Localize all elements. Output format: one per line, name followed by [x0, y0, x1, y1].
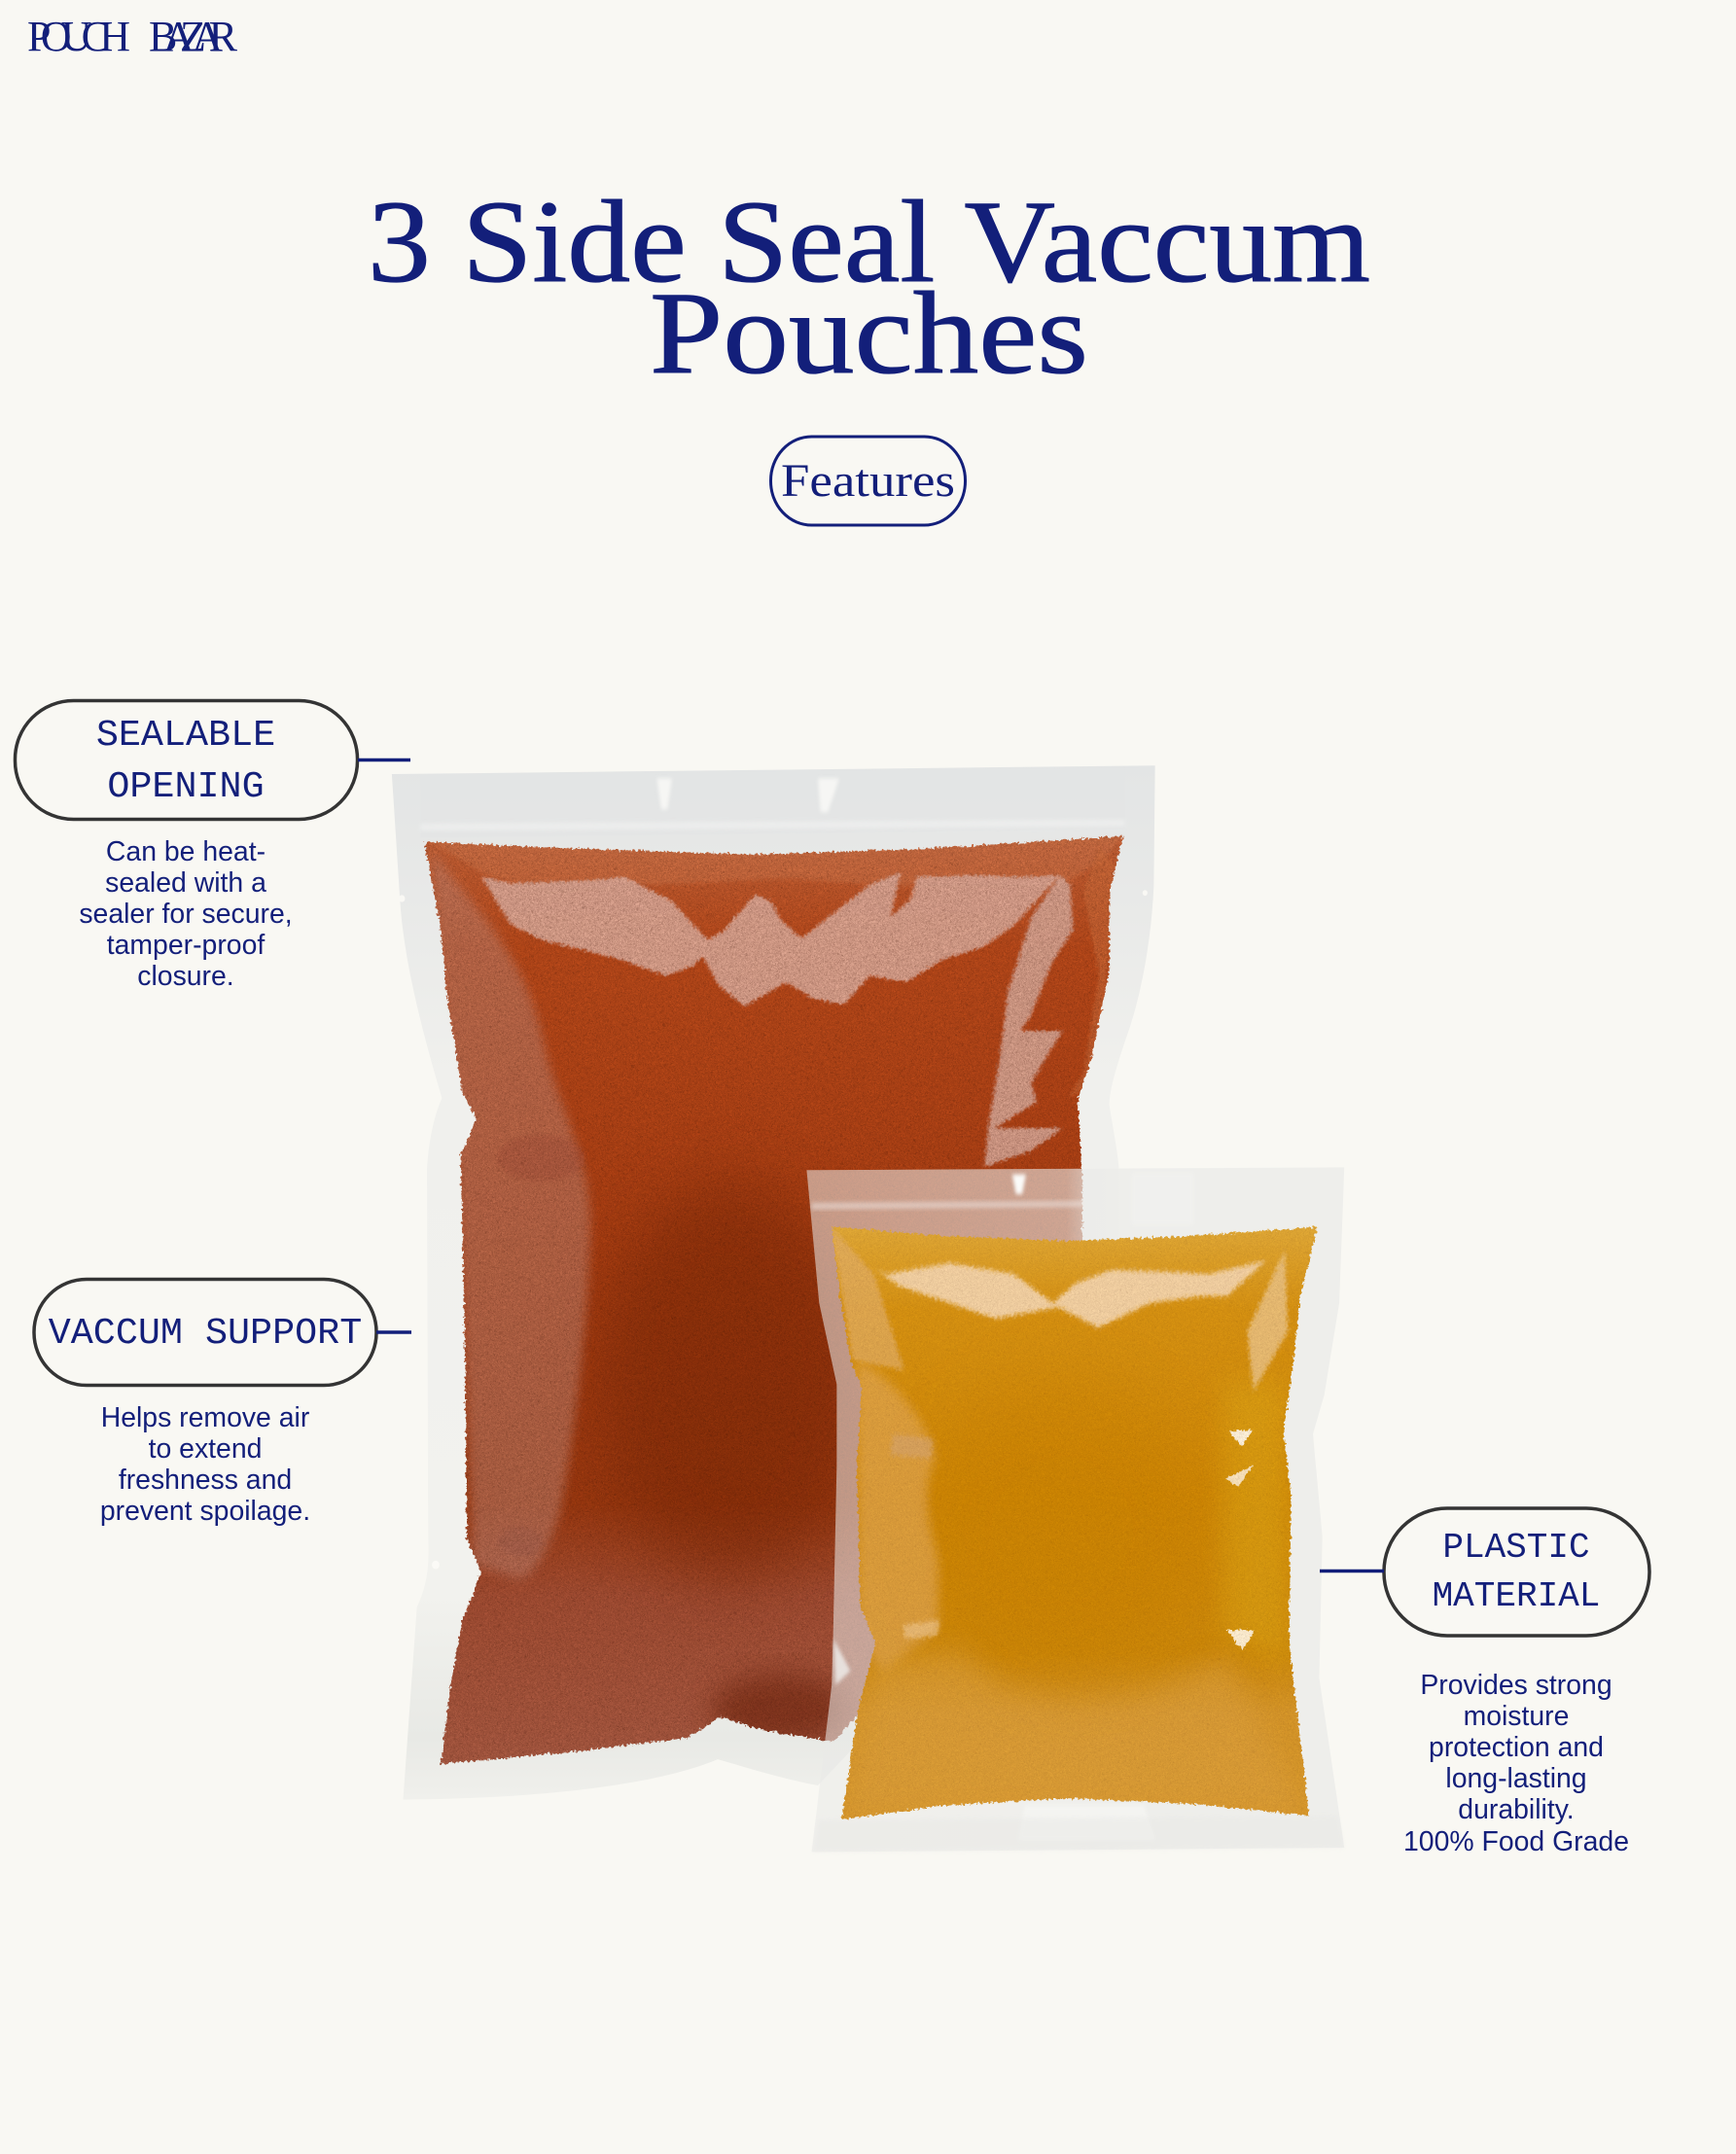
seal band and tear notches	[399, 767, 1148, 1569]
title: Pouches	[650, 268, 1088, 399]
logo: POUCH	[27, 13, 130, 60]
callout: vaccum support: VACCUM SUPPORT	[49, 1312, 362, 1355]
callout: sealable opening: OPENING	[107, 765, 265, 808]
right strip	[1222, 1381, 1291, 1664]
text: plastic material description: long-lasting	[1445, 1763, 1587, 1794]
title	[368, 177, 1370, 399]
callout: sealable opening	[16, 700, 410, 819]
text: plastic material description: moisture	[1464, 1701, 1569, 1732]
text: sealable opening description: closure.	[137, 961, 234, 992]
seal lines and notch	[812, 1172, 1344, 1852]
text: sealable opening description: Can be heat-	[106, 836, 266, 867]
text: vaccum support description: freshness and	[119, 1465, 292, 1496]
text: sealable opening description: tamper-proof	[107, 930, 265, 961]
callout: plastic material: MATERIAL	[1433, 1576, 1600, 1616]
left strip	[857, 1359, 939, 1671]
logo: BAZAR	[149, 13, 238, 60]
powder grain	[818, 1218, 1326, 1826]
title: 3 Side Seal Vaccum	[368, 177, 1370, 307]
top film highlight	[874, 1260, 1266, 1327]
text: sealable opening description	[79, 836, 293, 992]
powder grain	[417, 830, 1125, 1777]
dark centre shading	[925, 1381, 1200, 1677]
red powder	[417, 830, 1125, 1777]
pouch film	[806, 1167, 1344, 1852]
callout: vaccum support	[34, 1280, 411, 1385]
illustration: large red pouch	[392, 765, 1155, 1800]
logo	[27, 13, 238, 60]
features badge	[770, 437, 965, 525]
top edge band	[432, 836, 1120, 887]
text: vaccum support description: Helps remove air	[101, 1402, 309, 1433]
text: vaccum support description: prevent spoilage.	[100, 1496, 310, 1527]
pouch film	[392, 765, 1155, 1800]
top film highlight	[481, 846, 1115, 1167]
lower light area	[841, 1649, 1309, 1819]
features badge: Features	[781, 455, 955, 507]
text: sealable opening description: sealed with a	[105, 867, 266, 899]
text: plastic material description: 100% Food Grade	[1403, 1826, 1629, 1857]
illustration: small yellow pouch	[806, 1167, 1344, 1852]
callout: plastic material: PLASTIC	[1442, 1528, 1590, 1568]
text: plastic material description: durability.	[1458, 1794, 1575, 1825]
top left corner sheen	[832, 1226, 904, 1370]
dark shading	[599, 1183, 862, 1579]
glints	[1228, 1430, 1254, 1446]
text: vaccum support description	[100, 1402, 310, 1527]
text: sealable opening description: sealer for secure,	[79, 899, 293, 930]
callout: sealable opening: SEALABLE	[96, 714, 275, 757]
text: plastic material description	[1403, 1670, 1629, 1857]
text: plastic material description: protection and	[1429, 1732, 1604, 1763]
left glare strip	[431, 851, 590, 1579]
yellow powder	[818, 1218, 1326, 1826]
text: plastic material description: Provides strong	[1420, 1670, 1612, 1701]
text: vaccum support description: to extend	[149, 1433, 262, 1465]
right film highlight	[1247, 1250, 1288, 1392]
dent detail	[500, 1137, 578, 1179]
callout: plastic material	[1320, 1508, 1649, 1636]
